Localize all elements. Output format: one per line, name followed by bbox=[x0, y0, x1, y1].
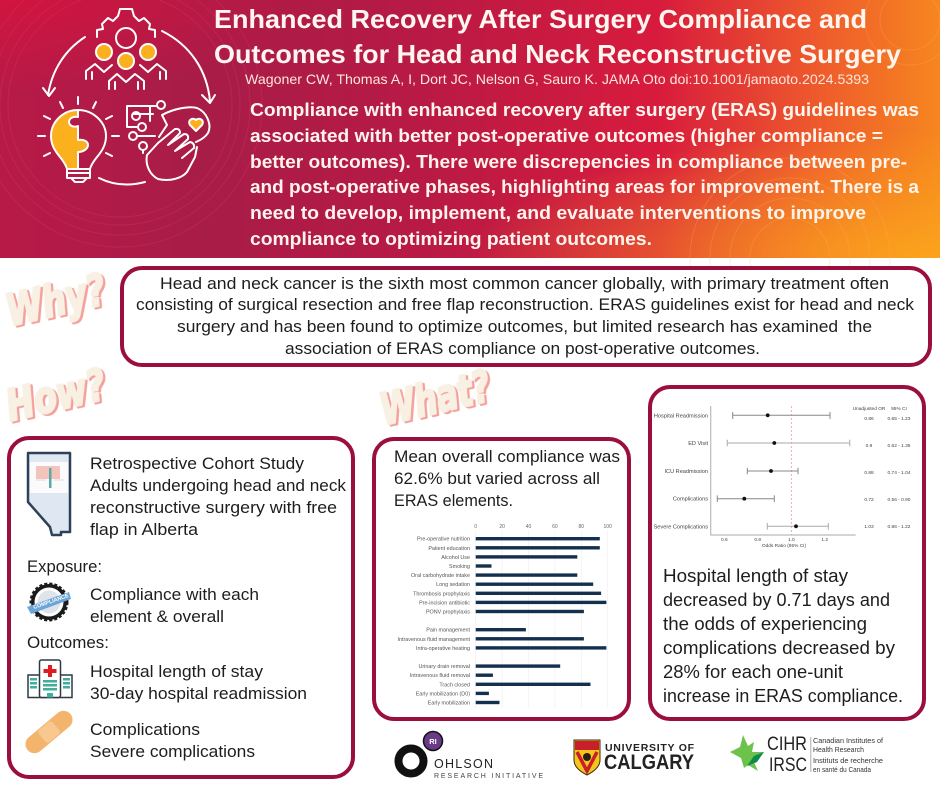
panel: why: association of ERAS compliance on post-operative outcomes. bbox=[285, 339, 760, 358]
panel: how bbox=[9, 438, 353, 777]
title bbox=[214, 4, 902, 69]
panel: results bbox=[650, 387, 924, 719]
bar chart: Intravenous fluid management bbox=[397, 637, 470, 643]
icon: puzzle light bulb bbox=[38, 97, 119, 182]
logo: CIHR IRSC: IRSC bbox=[769, 754, 807, 776]
header banner bbox=[0, 0, 940, 358]
bar chart: 100 bbox=[604, 524, 612, 530]
summary text bbox=[250, 99, 920, 249]
bar chart: 0 bbox=[474, 524, 477, 530]
forest plot: ICU Readmission bbox=[664, 469, 708, 475]
text: exposure detail: Compliance with each bbox=[90, 585, 259, 604]
text: outcomes list 1: 30-day hospital readmission bbox=[90, 684, 307, 703]
heading: How?: How? bbox=[1, 359, 111, 432]
logo: University of Calgary: CALGARY bbox=[604, 751, 694, 774]
bar chart: Early mobilization (D0) bbox=[416, 691, 470, 697]
forest plot: 1.03 bbox=[864, 524, 874, 530]
bar chart: Urinary drain removal bbox=[418, 664, 470, 670]
logo: Ohlson Research Initiative bbox=[398, 732, 543, 780]
logo: University of Calgary: UNIVERSITY OF bbox=[605, 742, 695, 754]
logo: Ohlson Research Initiative: RESEARCH INITIATIVE bbox=[434, 773, 543, 780]
bar chart: Thrombosis prophylaxis bbox=[413, 591, 470, 597]
forest plot: 0.56 - 0.90 bbox=[888, 497, 911, 503]
text: exposure label: Exposure: bbox=[27, 557, 102, 576]
logo: Ohlson Research Initiative: OHLSON bbox=[434, 757, 493, 771]
text: exposure detail bbox=[90, 585, 259, 626]
bar chart: 40 bbox=[526, 524, 531, 530]
forest plot: 1.0 bbox=[788, 537, 795, 543]
forest plot: ED Visit bbox=[688, 441, 708, 447]
text: study design: reconstructive surgery with free bbox=[90, 498, 337, 517]
forest plot: 0.86 - 1.22 bbox=[888, 524, 911, 530]
forest plot: Unadjusted OR bbox=[853, 406, 886, 412]
text: mean compliance: 62.6% but varied across all bbox=[394, 469, 600, 488]
forest plot: 95% CI bbox=[891, 406, 907, 412]
text: results summary: Hospital length of stay bbox=[663, 566, 848, 586]
logo: Ohlson Research Initiative: RI bbox=[429, 737, 437, 746]
text: results summary: the odds of experiencing bbox=[663, 614, 867, 634]
text: outcomes list 1: Hospital length of stay bbox=[90, 662, 264, 681]
bar chart: Intravenous fluid removal bbox=[410, 673, 470, 679]
text: study design: Retrospective Cohort Study bbox=[90, 454, 305, 473]
forest plot: 0.65 - 1.23 bbox=[888, 416, 911, 422]
forest plot: Complications bbox=[673, 497, 708, 503]
summary text: need to develop, implement, and evaluate interventions to improve bbox=[250, 202, 866, 223]
logo: CIHR IRSC bbox=[730, 733, 884, 776]
text: results summary bbox=[663, 566, 903, 706]
icon: hand and circuit bbox=[127, 101, 209, 180]
icon: compliance badge bbox=[27, 584, 71, 620]
summary text: Compliance with enhanced recovery after surgery (ERAS) guidelines was bbox=[250, 99, 919, 120]
icon: bandage bbox=[22, 707, 76, 757]
text: mean compliance bbox=[394, 447, 620, 510]
summary text: and post-operative phases, highlighting areas for improvement. There is a bbox=[250, 176, 920, 197]
bar chart: Trach closed bbox=[439, 682, 470, 688]
text: results summary: complications decreased by bbox=[663, 638, 895, 658]
panel: why: surgery and has been found to optimize outcomes, but limited research has examined the bbox=[177, 317, 872, 336]
forest plot: 0.62 - 1.35 bbox=[888, 443, 911, 449]
icon: circular arrows bbox=[43, 31, 215, 185]
text: outcomes list 1 bbox=[90, 662, 307, 703]
panel: why bbox=[122, 268, 930, 365]
forest plot: Hospital Readmission bbox=[654, 413, 708, 419]
bar chart: Oral carbohydrate intake bbox=[411, 573, 470, 579]
text: results summary: increase in ERAS compliance. bbox=[663, 686, 903, 706]
forest plot: 0.8 bbox=[754, 537, 761, 543]
bar chart: Patient education bbox=[428, 546, 470, 552]
bar chart: Pain management bbox=[426, 628, 470, 634]
icon: teamwork cycle bbox=[38, 9, 215, 185]
bar chart: 20 bbox=[499, 524, 505, 530]
bar chart: Early mobilization bbox=[428, 700, 470, 706]
logo: University of Calgary bbox=[574, 740, 695, 775]
bar chart: Long sedation bbox=[436, 582, 470, 588]
icon: Alberta map bbox=[28, 453, 70, 535]
heading: What?: What? bbox=[375, 361, 496, 436]
summary text: associated with better post-operative outcomes (higher compliance = bbox=[250, 125, 883, 146]
bar chart: Pre-operative nutrition bbox=[417, 537, 470, 543]
bar chart: Intra-operative heating bbox=[416, 646, 470, 652]
logo: CIHR IRSC: en santé du Canada bbox=[813, 765, 872, 774]
forest plot: 0.72 bbox=[864, 497, 874, 503]
forest plot: 1.2 bbox=[821, 537, 828, 543]
icon: gear and people bbox=[86, 9, 166, 89]
title: Outcomes for Head and Neck Reconstructive Surgery bbox=[214, 39, 902, 69]
forest plot: Odds Ratio (95% CI) bbox=[762, 543, 807, 549]
title: Enhanced Recovery After Surgery Compliance and bbox=[214, 4, 867, 34]
text: outcomes label: Outcomes: bbox=[27, 633, 109, 652]
icon: hospital bbox=[28, 660, 72, 698]
panel: why: consisting of surgical resection and free flap reconstruction. ERAS guidelines exist for head and neck bbox=[136, 295, 915, 314]
logo: CIHR IRSC: Canadian Institutes of bbox=[813, 736, 884, 745]
forest plot: 0.6 bbox=[721, 537, 728, 543]
bar chart: Alcohol Use bbox=[441, 555, 470, 561]
panel: what bbox=[374, 439, 629, 719]
forest plot: 0.86 bbox=[864, 416, 874, 422]
text: results summary: 28% for each one-unit bbox=[663, 662, 843, 682]
forest plot bbox=[654, 406, 911, 549]
summary text: better outcomes). There were discrepencies in compliance between pre- bbox=[250, 151, 907, 172]
text: study design: flap in Alberta bbox=[90, 520, 199, 539]
icon: compliance badge: COMPLIANCE bbox=[33, 593, 70, 611]
bar chart: 60 bbox=[552, 524, 558, 530]
summary text: compliance to optimizing patient outcomes. bbox=[250, 228, 652, 249]
text: study design: Adults undergoing head and neck bbox=[90, 476, 346, 495]
bar chart: PONV prophylaxis bbox=[426, 610, 470, 616]
forest plot: 0.9 bbox=[866, 443, 873, 449]
forest plot: 0.74 - 1.04 bbox=[888, 470, 911, 476]
heading: Why?: Why? bbox=[1, 264, 111, 337]
bar chart bbox=[397, 524, 612, 708]
logo: CIHR IRSC: CIHR bbox=[767, 733, 807, 755]
text: results summary: decreased by 0.71 days and bbox=[663, 590, 890, 610]
logo: CIHR IRSC: Health Research bbox=[813, 745, 864, 754]
text: mean compliance: Mean overall compliance was bbox=[394, 447, 620, 466]
panel: why: Head and neck cancer is the sixth most common cancer globally, with primary treatment often bbox=[160, 274, 889, 293]
citation: Wagoner CW, Thomas A, I, Dort JC, Nelson G, Sauro K. JAMA Oto doi:10.1001/jamaoto.2024.5393 bbox=[245, 71, 869, 87]
bar chart: Smoking bbox=[449, 564, 470, 570]
text: outcomes list 2: Complications bbox=[90, 720, 200, 739]
bar chart: 80 bbox=[579, 524, 584, 530]
text: outcomes list 2: Severe complications bbox=[90, 742, 255, 761]
forest plot: Severe Complications bbox=[654, 524, 708, 530]
text: mean compliance: ERAS elements. bbox=[394, 491, 513, 510]
bar chart: Pre-incision antibiotic bbox=[419, 600, 470, 606]
logo: CIHR IRSC: Instituts de recherche bbox=[813, 756, 883, 765]
text: study design bbox=[90, 454, 346, 539]
text: exposure detail: element & overall bbox=[90, 607, 224, 626]
text: outcomes list 2 bbox=[90, 720, 255, 761]
forest plot: 0.88 bbox=[864, 470, 874, 476]
